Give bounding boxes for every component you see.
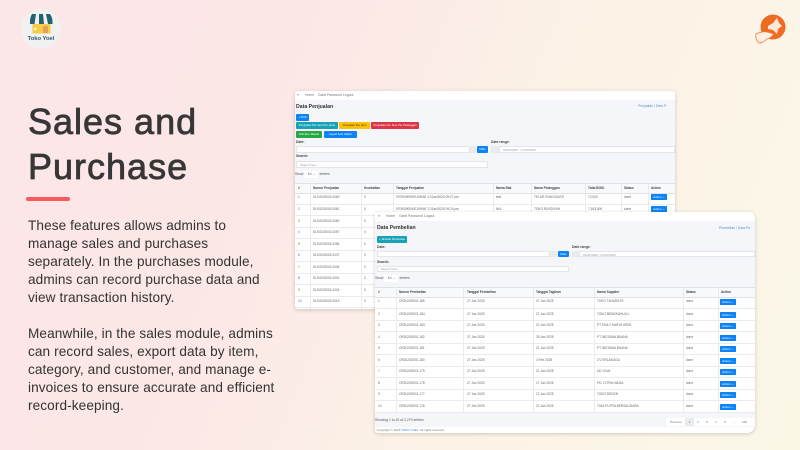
table: sales: 72,000 [588,195,598,199]
table: sales: SLS/2025/01/1060 [313,218,339,222]
entries selector: Show entries [375,276,410,280]
table: sales: Nomor Penjualan [313,186,339,190]
table: sales: 9 [298,288,300,292]
table: purchases: 12 Jan 2025 [536,392,554,396]
table: purchases: 6 [378,358,380,362]
table: purchases: TIGA PUTRA BERSAUDARA [597,404,639,408]
table: purchases: 7 [378,369,380,373]
table: purchases: ORD/2025/01.179 [399,369,425,373]
table: sales: 0 [364,195,366,199]
export buttons: Penjualan Per Item Per Pelanggan [373,123,417,127]
table: sales: 3 [298,218,300,222]
date filter: Date: [296,140,304,144]
add purchase button: + Tambah Pembelian [379,237,405,241]
table: purchases: done [686,358,693,362]
table: purchases: 4 [378,334,380,338]
table: sales: SLS/2025/01/1034 [313,264,339,268]
search: Search: [377,260,389,264]
table: purchases: 27 Jan 2025 [467,299,485,303]
table: purchases: 22 Jan 2025 [536,404,554,408]
table: sales: 0 [364,276,366,280]
table: purchases: 8 [378,380,380,384]
table: purchases: 27 Jan 2025 [536,299,554,303]
table: sales: SLS/2025/01/1057 [313,230,339,234]
table: purchases: done [686,392,693,396]
table: sales: 2 [298,207,300,211]
date filter: Filter [479,147,486,151]
table: sales: 0 [364,264,366,268]
table: sales: TOKO RUSDIYAH [534,207,560,211]
table: purchases: 3 [378,323,380,327]
table: purchases: 27 Jan 2025 [467,334,485,338]
table: purchases: ORD/2025/01.181 [399,346,425,350]
table: purchases: done [686,346,693,350]
table: sales: SLS/2025/01/1024 [313,288,339,292]
table: purchases: 27 Jan 2025 [467,404,485,408]
table: purchases: Action ⌄ [722,393,734,397]
navbar: Ganti Password [399,214,423,218]
table: sales: 5 [298,242,300,246]
table: purchases: 27 Jan 2025 [467,392,485,396]
text block: sales paragraph: Meanwhile, in the sales module, admins [28,326,273,341]
table: purchases: 17 Jan 2025 [536,380,554,384]
footer [375,427,757,433]
title: Purchase [28,146,188,187]
table: purchases: 4 Feb 2025 [536,358,552,362]
table: purchases: Action ⌄ [722,300,734,304]
table: purchases: TOKO DEDEN [597,392,618,396]
table: sales: 4 [298,230,300,234]
date filter: Date range: [572,244,591,248]
title: Sales and [28,101,197,142]
navbar: Home [305,93,314,97]
navbar: Ganti Password [318,93,342,97]
table: sales: TELUR RUNGGASTI [534,195,564,199]
table: purchases: PD. CITRA NIAGA [597,380,623,384]
pagination: 4 [715,420,717,424]
table: sales: 0 [364,207,366,211]
table: sales: done [624,207,631,211]
table: purchases: 5 [378,346,380,350]
export buttons: Import Item Faktur [329,132,352,136]
table: purchases: PT FAJLY KARYA KRISI [597,323,631,327]
table: purchases: Action ⌄ [722,382,734,386]
text block: sales paragraph [28,326,274,413]
table: purchases: Action ⌄ [722,324,734,328]
pagination: 3 [706,420,708,424]
table: purchases: # [378,290,380,294]
panel: sales data screenshot [295,91,675,309]
table: purchases: Action ⌄ [722,347,734,351]
text block: sales paragraph: invoices to ensure accurate and efficient [28,380,274,395]
text block: intro paragraph: admins can record purchase data and [28,272,260,287]
table: purchases: 29 Jan 2025 [536,334,554,338]
pagination [666,418,755,426]
table: purchases: done [686,323,693,327]
panel: purchase data screenshot [375,212,755,433]
table: purchases: Action ⌄ [722,336,734,340]
breadcrumb: Pembelian / Data Pe [719,226,750,230]
table: purchases: Action [721,290,731,294]
table: purchases: done [686,369,693,373]
date filter: 01/01/2025 - 01/31/2025 [583,252,616,256]
table: sales: 7 [298,264,300,268]
table: sales: N/A [496,207,501,211]
entries selector: 10 ⌄ [308,172,315,176]
table: purchases: 27 Jan 2025 [467,323,485,327]
date filter [377,244,755,257]
date filter [296,140,675,153]
table: purchases: done [686,312,693,316]
navbar: Logout [343,93,353,97]
text block: sales paragraph: record-keeping. [28,398,124,413]
table: sales: Nama Pelanggan [534,186,560,190]
table: purchases: 21 Jan 2025 [536,369,554,373]
table: purchases: Action ⌄ [722,358,734,362]
table: purchases: Action ⌄ [722,404,734,408]
table: purchases: done [686,404,693,408]
navbar: Logout [424,214,434,218]
table: purchases: 27 Jan 2025 [467,380,485,384]
table: sales: 0709/0909/KEJ/I/INI/I 17/Jan/2025 09:27 pm [396,195,459,199]
table: purchases: ORD/2025/01.180 [399,358,425,362]
table info: Showing 1 to 10 of 2,279 entries [375,418,424,422]
table: purchases: 9 [378,392,380,396]
table: sales: 7,163,000 [588,207,602,211]
entries selector [295,171,330,178]
export buttons: Penjualan Per Item Per Jenis [299,123,335,127]
pagination: 2 [697,420,699,424]
table: sales: SLS/2025/01/1037 [313,253,339,257]
table: sales: 1 [298,195,300,199]
logo: Toko Yoel [21,9,61,49]
table: purchases: 27 Jan 2025 [467,358,485,362]
table: sales: SLS/2025/01/1063 [313,195,339,199]
table: purchases: PT INDTAMA BUANA [597,334,628,338]
table: purchases: Nomor Pembelian [399,290,426,294]
date filter: Date: [377,244,385,248]
export buttons [296,114,419,138]
add purchase button [377,236,407,242]
table: purchases: Tanggal Tagihan [536,290,561,294]
table: purchases: 2 [378,312,380,316]
table: purchases: done [686,380,693,384]
search: Search: [296,154,308,158]
table: sales: # [298,186,300,190]
table: sales: Kembalian [364,186,380,190]
table: purchases: 27 Jan 2025 [467,312,485,316]
table: purchases: 27 Jan 2025 [536,312,554,316]
logo: orange fox [755,14,786,44]
table: purchases [375,287,755,413]
table: purchases: UD. KIVA [597,369,610,373]
table: purchases: ORD/2025/01.183 [399,323,425,327]
table: purchases: ORD/2025/01.176 [399,404,425,408]
pagination: 5 [724,420,726,424]
heading: Data Penjualan: Data Penjualan [296,104,333,110]
export buttons: Penjualan Per Item [343,123,366,127]
table: purchases: ORD/2025/01.185 [399,299,425,303]
table: sales: 8 [298,276,300,280]
table: purchases: 10 [378,404,382,408]
table: sales: Status [624,186,634,190]
export buttons: Edit Item Masuk [299,132,319,136]
table: purchases: Action ⌄ [722,312,734,316]
table: sales: Action ⌄ [653,207,665,211]
table: sales: 10 [298,299,302,303]
search [296,154,488,168]
table: sales: test [496,195,501,199]
entries selector: Show entries [295,172,330,176]
text block: sales paragraph: can record sales, export data by item, [28,344,258,359]
pagination: Previous [670,420,682,424]
table: sales: 0 [364,218,366,222]
table: purchases: 21 Jan 2025 [536,346,554,350]
table: sales: Tanggal Penjualan [396,186,424,190]
navbar: ≡ [378,214,380,218]
table: sales: 0 [364,230,366,234]
table: purchases: 1 [378,299,380,303]
table: sales: Action [651,186,661,190]
table: purchases: TOKO BENGKAHULU [597,312,629,316]
table: sales: 0 [364,299,366,303]
table: purchases: PT INDTAMA BUANA [597,346,628,350]
export buttons: + POS [298,115,307,119]
table: purchases: ORD/2025/01.182 [399,334,425,338]
table: sales: Total BOKI [588,186,604,190]
text block: intro paragraph: These features allows admins to [28,218,226,233]
date filter: 01/01/2022 - 01/31/2025 [503,148,536,152]
pagination: … [733,420,736,424]
pagination: 1 [689,420,690,424]
table: purchases: Status [686,290,696,294]
breadcrumb: Penjualan / Data P [638,104,666,108]
table: purchases: TOKO TAHARA RI [597,299,623,303]
table: sales: Nama Rak [496,186,511,190]
table: sales: SLS/2025/01/1061 [313,207,339,211]
navbar [375,212,755,221]
heading: Data Pembelian: Data Pembelian [377,225,416,231]
title underline [26,197,70,200]
table: purchases: 22 Jan 2025 [536,323,554,327]
text block: intro paragraph: manage sales and purchases [28,236,208,251]
table: purchases: done [686,299,693,303]
table: purchases: done [686,334,693,338]
pagination: 228 [742,420,747,424]
table: purchases: Action ⌄ [722,370,734,374]
table: sales: 0 [364,288,366,292]
text block: sales paragraph: category, and customer, and manage e- [28,362,271,377]
navbar [295,91,675,100]
table: sales: Action ⌄ [653,195,665,199]
table: sales: 0 [364,242,366,246]
table: sales: SLS/2025/01/1056 [313,242,339,246]
footer: Copyright © 2025 TOKO YOEL. All rights reserved. [377,428,445,432]
search [377,260,569,272]
table: purchases: ORD/2025/01.177 [399,392,425,396]
table: sales: 6 [298,253,300,257]
entries selector [375,275,410,282]
table: purchases: Tanggal Pembelian [467,290,496,294]
table: purchases: Nama Supplier [597,290,619,294]
table: purchases: 27 Jan 2025 [467,369,485,373]
navbar: Home [386,214,395,218]
title [28,101,197,187]
date filter: Filter [560,252,567,256]
entries selector: 10 ⌄ [388,276,395,280]
table: sales: SLS/2025/01/1031 [313,276,339,280]
table: purchases: ORD/2025/01.178 [399,380,425,384]
text block: intro paragraph [28,218,260,305]
table: sales: SLS/2025/01/1015 [313,299,339,303]
navbar: ≡ [297,93,299,97]
text block: intro paragraph: separately. In the purchases module, [28,254,254,269]
search: Search here... [381,266,400,270]
table: purchases: ORD/2025/01.184 [399,312,425,316]
search: Search here... [300,163,319,167]
table: sales [295,183,675,309]
table: purchases: CV ERLANGGA [597,358,620,362]
logo: Toko Yoel: Toko Yoel [28,36,55,42]
text block: intro paragraph: view transaction history. [28,290,175,305]
table: purchases: 27 Jan 2025 [467,346,485,350]
table: sales: 0 [364,253,366,257]
table: sales: done [624,195,631,199]
date filter: Date range: [491,140,510,144]
table: sales: 0709/0909/KEJ/I/INI/I 17/Jan/2025 09:24 pm [396,207,459,211]
